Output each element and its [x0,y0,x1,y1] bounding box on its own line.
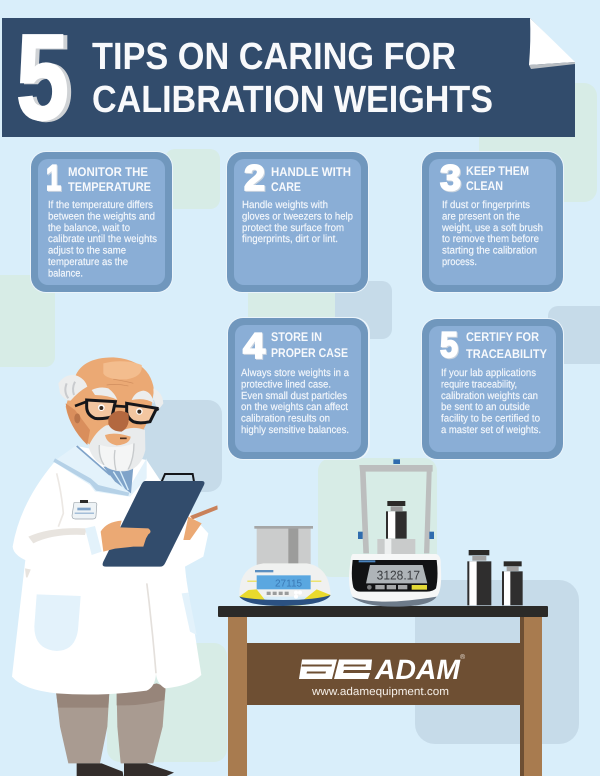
heading [271,330,348,360]
large weight [467,550,491,605]
pencil [190,505,218,519]
body text: highly sensitive balances. [241,425,349,436]
heading: PROPER CASE [271,346,348,360]
logo: Adam [299,654,466,698]
big number 5: 5 [20,10,73,146]
body text: on the weights can affect [241,402,348,413]
title banner [2,9,575,146]
body text: weight, use a soft brush [441,223,543,234]
body text: Even small dust particles [241,391,347,402]
illustration: scientist [12,357,218,776]
body text: protective lined case. [241,379,331,390]
title text: TIPS ON CARING FOR [92,36,456,78]
beard [88,425,145,471]
number 5: 5 [440,324,458,365]
heading [466,330,548,361]
head [66,357,154,445]
body text: adjust to the same [48,246,126,257]
body text [441,200,543,268]
body text: protect the surface from [242,223,344,234]
upper body and head [13,357,218,583]
clipboard handle [162,474,194,482]
name badge [72,503,97,519]
body text: between the weights and [48,211,155,222]
cuff [85,526,102,555]
body text: calibrate until the weights [48,234,157,245]
balance: precision scale with frame and weight: 3128.17 [377,569,420,583]
heading: KEEP THEM [466,164,529,178]
body text: to remove them before [442,234,539,245]
panel: tip 5 [421,318,564,460]
big number 5: 5 [16,9,69,145]
heading: STORE IN [271,330,322,344]
icon: ae mark [299,660,372,679]
number 1: 1 [47,158,62,199]
table [218,606,548,776]
body text: fingerprints, dirt or lint. [242,234,338,245]
balance: precision scale with frame and weight [349,459,441,607]
heading: TRACEABILITY [466,347,548,361]
body text [242,200,353,245]
body text: be sent to an outside [441,402,530,413]
heading [68,165,151,194]
logo: Adam: ® [460,654,466,661]
heading: CARE [271,180,301,194]
coat pocket [34,594,81,651]
body text: temperature as the [48,257,128,268]
panel: tip 4 [227,317,370,460]
number 3: 3 [440,157,461,198]
body text: Always store weights in a [241,368,349,379]
clipboard [103,481,204,567]
panel: tip 2 [226,151,369,293]
body text: require traceability, [441,379,517,390]
body text: If dust or fingerprints [442,200,530,211]
heading: TEMPERATURE [68,180,151,194]
body text: If your lab applications [441,368,536,379]
lab coat lower [12,560,201,695]
title text: CALIBRATION WEIGHTS [92,79,493,121]
balance: compact scale with draft shield [239,526,331,606]
collar [53,445,147,497]
number 4: 4 [244,326,266,367]
nose [108,411,129,432]
heading: HANDLE WITH [271,165,351,179]
logo: Adam: www.adamequipment.com [311,686,449,698]
number 2: 2 [245,158,266,199]
title text [92,36,493,121]
small weight [502,561,523,605]
body text [48,200,157,279]
body text: starting the calibration [442,246,537,257]
icon: folded page corner [529,18,575,65]
number 2: 2 [244,157,265,198]
number 4: 4 [243,325,265,366]
tie and shirt [103,467,133,493]
mouth [105,434,131,445]
panel: tip 1 [30,151,173,293]
body text [241,368,349,436]
number 3: 3 [441,158,462,199]
heading: CERTIFY FOR [466,330,539,344]
calibration weight on pan [386,501,407,539]
right hand [183,517,202,540]
left hand [101,521,150,552]
body text: the balance, wait to [48,223,130,234]
logo: Adam: ADAM [374,654,461,685]
hair [58,375,87,401]
body text: are present on the [442,211,520,222]
body text: gloves or tweezers to help [242,211,353,222]
heading: MONITOR THE [68,165,148,179]
body text: balance. [48,268,83,279]
body text: facility to be certified to [441,414,540,425]
body text: process. [442,257,477,268]
ear [74,413,80,423]
body text: Handle weights with [242,200,328,211]
legs and shoes [56,683,174,776]
glasses [87,400,157,423]
eyebrows [92,387,117,400]
standalone weights [467,550,523,605]
balance: compact scale with draft shield: 27115 [275,578,302,589]
number 1: 1 [46,157,61,198]
heading: CLEAN [466,179,503,193]
body text: calibration results on [241,414,330,425]
body text: calibration weights can [441,391,538,402]
heading [271,165,351,194]
panel: tip 3 [421,151,564,293]
body text: If the temperature differs [48,200,153,211]
body text: a master set of weights. [441,425,541,436]
number 5: 5 [441,325,459,366]
heading [466,164,529,193]
body text [441,368,541,436]
